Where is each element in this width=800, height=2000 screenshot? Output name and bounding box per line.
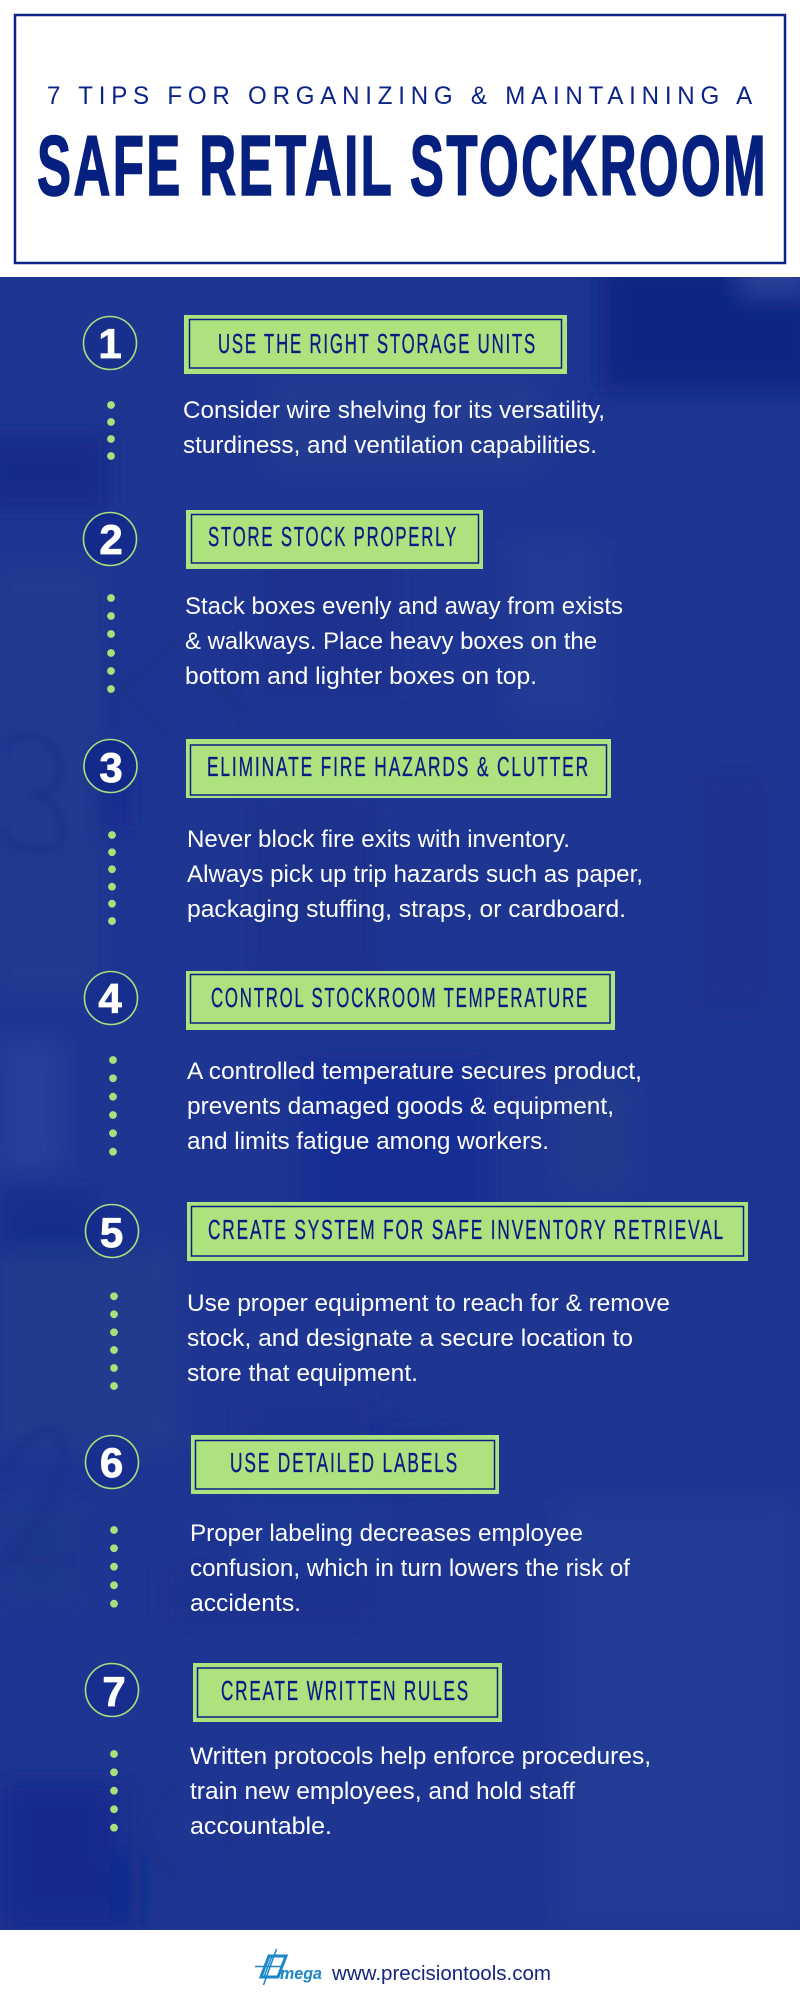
number badge 7: 7	[102, 1668, 126, 1715]
dotted connector 5	[110, 1292, 118, 1390]
description 3: Always pick up trip hazards such as paper,	[187, 861, 643, 888]
number badge 3: 3	[99, 744, 123, 791]
description 2: Stack boxes evenly and away from exists	[185, 593, 623, 620]
tip 3	[84, 739, 643, 925]
tip 5	[86, 1202, 748, 1390]
dotted connector 3	[108, 831, 116, 925]
number badge 2: 2	[99, 516, 123, 563]
description 1: Consider wire shelving for its versatility,	[183, 397, 605, 424]
description 7: train new employees, and hold staff	[190, 1778, 575, 1805]
icon: Omega logo	[255, 1949, 322, 1985]
description 6: accidents.	[190, 1590, 301, 1617]
tip 2	[84, 510, 623, 693]
number badge 6	[86, 1436, 138, 1488]
description 5: store that equipment.	[187, 1360, 418, 1387]
description 4	[187, 1058, 642, 1155]
description 7	[190, 1743, 651, 1840]
heading box 5	[187, 1202, 748, 1261]
number badge 6: 6	[100, 1439, 123, 1486]
number badge 2	[84, 512, 136, 566]
heading box 4	[186, 971, 615, 1030]
description 5	[187, 1290, 670, 1387]
number badge 5: 5	[100, 1209, 123, 1256]
description 5: stock, and designate a secure location to	[187, 1325, 633, 1352]
number badge 1	[84, 316, 136, 370]
description 6: Proper labeling decreases employee	[190, 1520, 583, 1547]
description 3: Never block fire exits with inventory.	[187, 826, 570, 853]
tip 1	[84, 315, 605, 460]
icon: Omega logo: mega	[280, 1964, 322, 1983]
description 6	[190, 1520, 630, 1617]
number badge 4: 4	[98, 975, 122, 1022]
footer	[255, 1949, 551, 1985]
heading box 1: USE THE RIGHT STORAGE UNITS	[218, 328, 537, 359]
heading box 6: USE DETAILED LABELS	[230, 1447, 459, 1478]
dotted connector 4	[109, 1056, 117, 1156]
title frame	[15, 15, 785, 263]
description 3: packaging stuffing, straps, or cardboard.	[187, 896, 626, 923]
description 1: sturdiness, and ventilation capabilities.	[183, 432, 597, 459]
description 7: accountable.	[190, 1813, 332, 1840]
description 5: Use proper equipment to reach for & remove	[187, 1290, 670, 1317]
website url: www.precisiontools.com	[331, 1963, 551, 1985]
description 4: and limits fatigue among workers.	[187, 1128, 549, 1155]
heading box 2	[186, 510, 483, 569]
title panel	[15, 15, 785, 263]
description 4: A controlled temperature secures product,	[187, 1058, 642, 1085]
dotted connector 7	[110, 1750, 118, 1832]
heading box 3	[186, 739, 611, 798]
number badge 4	[84, 972, 138, 1024]
description 6: confusion, which in turn lowers the risk of	[190, 1555, 630, 1582]
description 2	[185, 593, 623, 690]
heading box 2: STORE STOCK PROPERLY	[208, 521, 458, 552]
number badge 5	[86, 1204, 138, 1258]
description 2: & walkways. Place heavy boxes on the	[185, 628, 597, 655]
number badge 3	[84, 740, 137, 792]
tip 6	[86, 1435, 630, 1617]
dotted connector 2	[107, 594, 115, 693]
description 4: prevents damaged goods & equipment,	[187, 1093, 614, 1120]
description 2: bottom and lighter boxes on top.	[185, 663, 537, 690]
heading box 1	[184, 315, 567, 374]
description 7: Written protocols help enforce procedures,	[190, 1743, 651, 1770]
tip 7	[86, 1663, 651, 1840]
number badge 7	[86, 1664, 138, 1716]
tip 4	[84, 971, 642, 1156]
subtitle: 7 TIPS FOR ORGANIZING & MAINTAINING A	[47, 82, 758, 110]
heading box 6	[191, 1435, 499, 1494]
heading box 7	[193, 1663, 502, 1722]
dotted connector 6	[110, 1526, 118, 1608]
heading box 7: CREATE WRITTEN RULES	[221, 1675, 470, 1706]
description 1	[183, 397, 605, 459]
dotted connector 1	[107, 401, 115, 460]
description 3	[187, 826, 643, 923]
number badge 1: 1	[98, 320, 122, 367]
